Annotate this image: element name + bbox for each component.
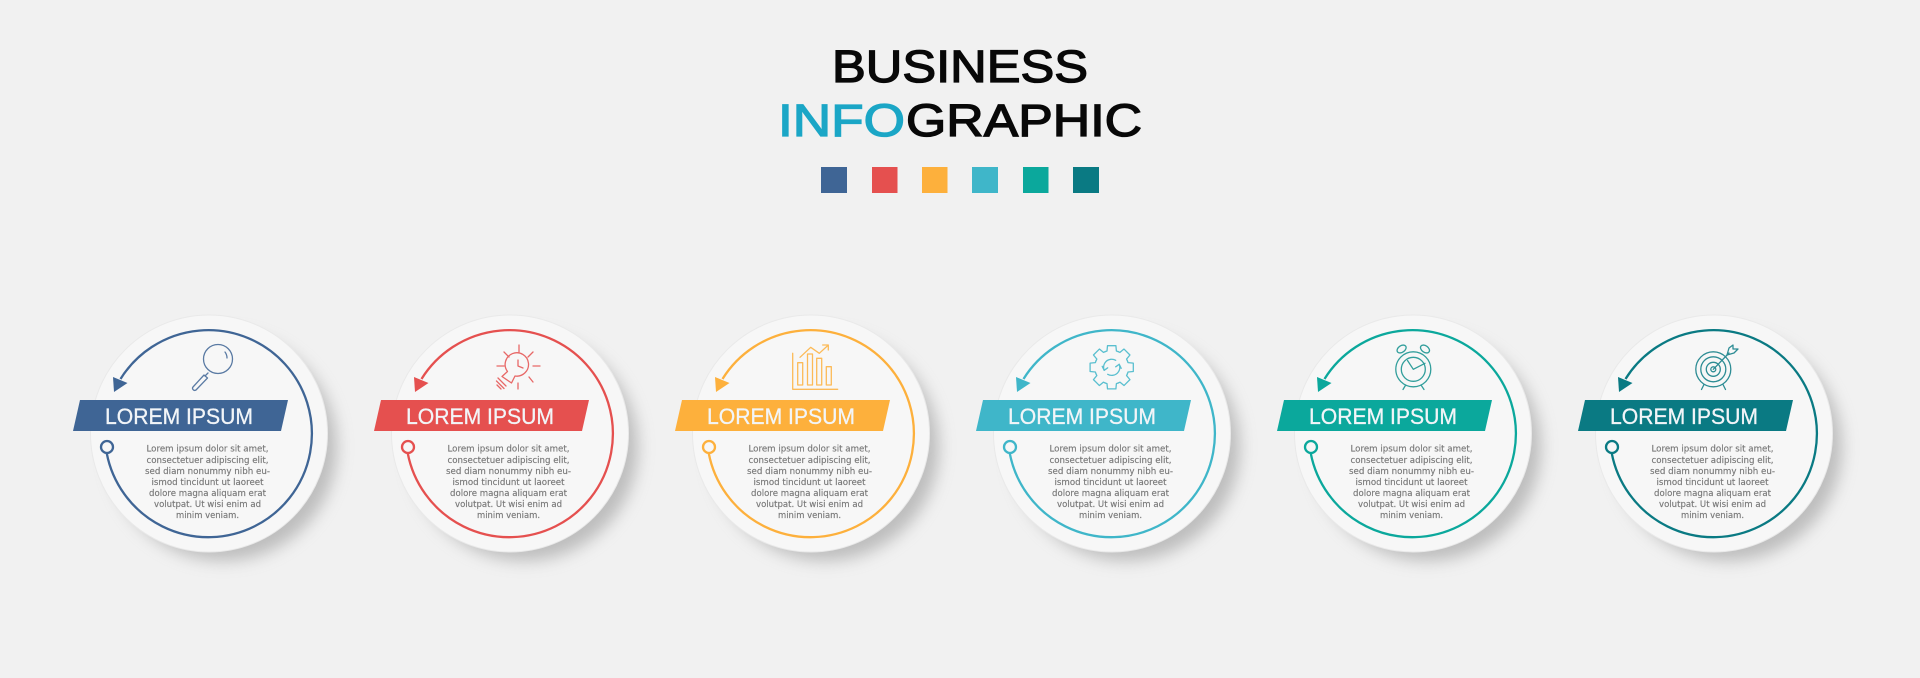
body text: ismod tincidunt ut laoreet — [1356, 478, 1468, 488]
body text: volutpat. Ut wisi enim ad — [1057, 500, 1164, 510]
title: INFO — [778, 95, 905, 146]
body text: dolore magna aliquam erat — [149, 489, 267, 499]
body text: sed diam nonummy nibh eu- — [1048, 467, 1173, 477]
body text: consectetuer adipiscing elit, — [1350, 456, 1472, 466]
body text: ismod tincidunt ut laoreet — [452, 478, 565, 488]
body text: dolore magna aliquam erat — [1654, 489, 1772, 499]
body text: minim veniam. — [1681, 511, 1744, 521]
body text: sed diam nonummy nibh eu- — [1349, 467, 1474, 477]
icon: target — [1696, 345, 1738, 390]
banner: LOREM IPSUM — [707, 404, 855, 429]
body text: sed diam nonummy nibh eu- — [1650, 467, 1775, 477]
body text: sed diam nonummy nibh eu- — [747, 467, 872, 477]
body text: minim veniam. — [778, 511, 841, 521]
body text: sed diam nonummy nibh eu- — [446, 467, 571, 477]
body text: Lorem ipsum dolor sit amet, — [146, 445, 268, 455]
ring with arrow — [1305, 330, 1516, 537]
body text: volutpat. Ut wisi enim ad — [455, 500, 562, 510]
body text: dolore magna aliquam erat — [450, 489, 568, 499]
body text — [747, 445, 872, 521]
body text: consectetuer adipiscing elit, — [1652, 456, 1774, 466]
title — [778, 41, 1142, 146]
body text: ismod tincidunt ut laoreet — [754, 478, 866, 488]
body text: consectetuer adipiscing elit, — [1050, 456, 1172, 466]
ring with arrow — [402, 330, 613, 537]
icon: light bulb — [496, 345, 540, 389]
body text: sed diam nonummy nibh eu- — [145, 467, 270, 477]
body text: minim veniam. — [176, 511, 239, 521]
body text: consectetuer adipiscing elit, — [748, 456, 870, 466]
body text — [1048, 445, 1173, 521]
title: BUSINESS — [832, 41, 1088, 92]
body text: minim veniam. — [1079, 511, 1142, 521]
body text: ismod tincidunt ut laoreet — [152, 478, 264, 488]
body text: dolore magna aliquam erat — [751, 489, 869, 499]
body text: volutpat. Ut wisi enim ad — [756, 500, 863, 510]
banner — [1277, 400, 1492, 431]
banner: LOREM IPSUM — [1309, 404, 1457, 429]
body text: Lorem ipsum dolor sit amet, — [1652, 445, 1774, 455]
body text: Lorem ipsum dolor sit amet, — [1350, 445, 1472, 455]
banner — [374, 400, 589, 431]
banner — [1578, 400, 1793, 431]
panel: step 5 green — [1277, 315, 1541, 561]
body text: dolore magna aliquam erat — [1353, 489, 1471, 499]
body text — [145, 445, 270, 521]
body text: Lorem ipsum dolor sit amet, — [1050, 445, 1172, 455]
icon: gear — [1090, 346, 1133, 389]
body text: minim veniam. — [1380, 511, 1443, 521]
body text: Lorem ipsum dolor sit amet, — [448, 445, 570, 455]
banner: LOREM IPSUM — [1610, 404, 1758, 429]
panel: step 1 blue — [73, 315, 337, 561]
body text: ismod tincidunt ut laoreet — [1656, 478, 1769, 488]
ring with arrow — [1606, 330, 1817, 537]
body text: volutpat. Ut wisi enim ad — [1659, 500, 1766, 510]
body text — [446, 445, 571, 521]
title: GRAPHIC — [906, 95, 1142, 146]
body text — [1650, 445, 1775, 521]
body text: Lorem ipsum dolor sit amet, — [748, 445, 870, 455]
body text: ismod tincidunt ut laoreet — [1054, 478, 1167, 488]
body text: consectetuer adipiscing elit, — [146, 456, 268, 466]
body text — [1349, 445, 1474, 521]
icon: alarm clock — [1396, 343, 1431, 390]
panel: step 4 teal — [976, 315, 1240, 561]
panel: step 2 red — [374, 315, 638, 561]
banner — [73, 400, 288, 431]
icon: magnifier — [192, 344, 232, 390]
body text: minim veniam. — [477, 511, 540, 521]
ring with arrow — [1004, 330, 1215, 537]
colour swatches — [821, 167, 1099, 193]
panel: step 3 orange — [675, 315, 939, 561]
icon: bar chart — [793, 345, 838, 389]
ring with arrow — [101, 330, 312, 537]
body text: volutpat. Ut wisi enim ad — [154, 500, 261, 510]
banner — [976, 400, 1191, 431]
banner: LOREM IPSUM — [1008, 404, 1156, 429]
banner — [675, 400, 890, 431]
banner: LOREM IPSUM — [105, 404, 253, 429]
panel: step 6 dark teal — [1578, 315, 1842, 561]
ring with arrow — [703, 330, 914, 537]
body text: dolore magna aliquam erat — [1052, 489, 1170, 499]
body text: consectetuer adipiscing elit, — [448, 456, 570, 466]
body text: volutpat. Ut wisi enim ad — [1358, 500, 1465, 510]
banner: LOREM IPSUM — [406, 404, 554, 429]
